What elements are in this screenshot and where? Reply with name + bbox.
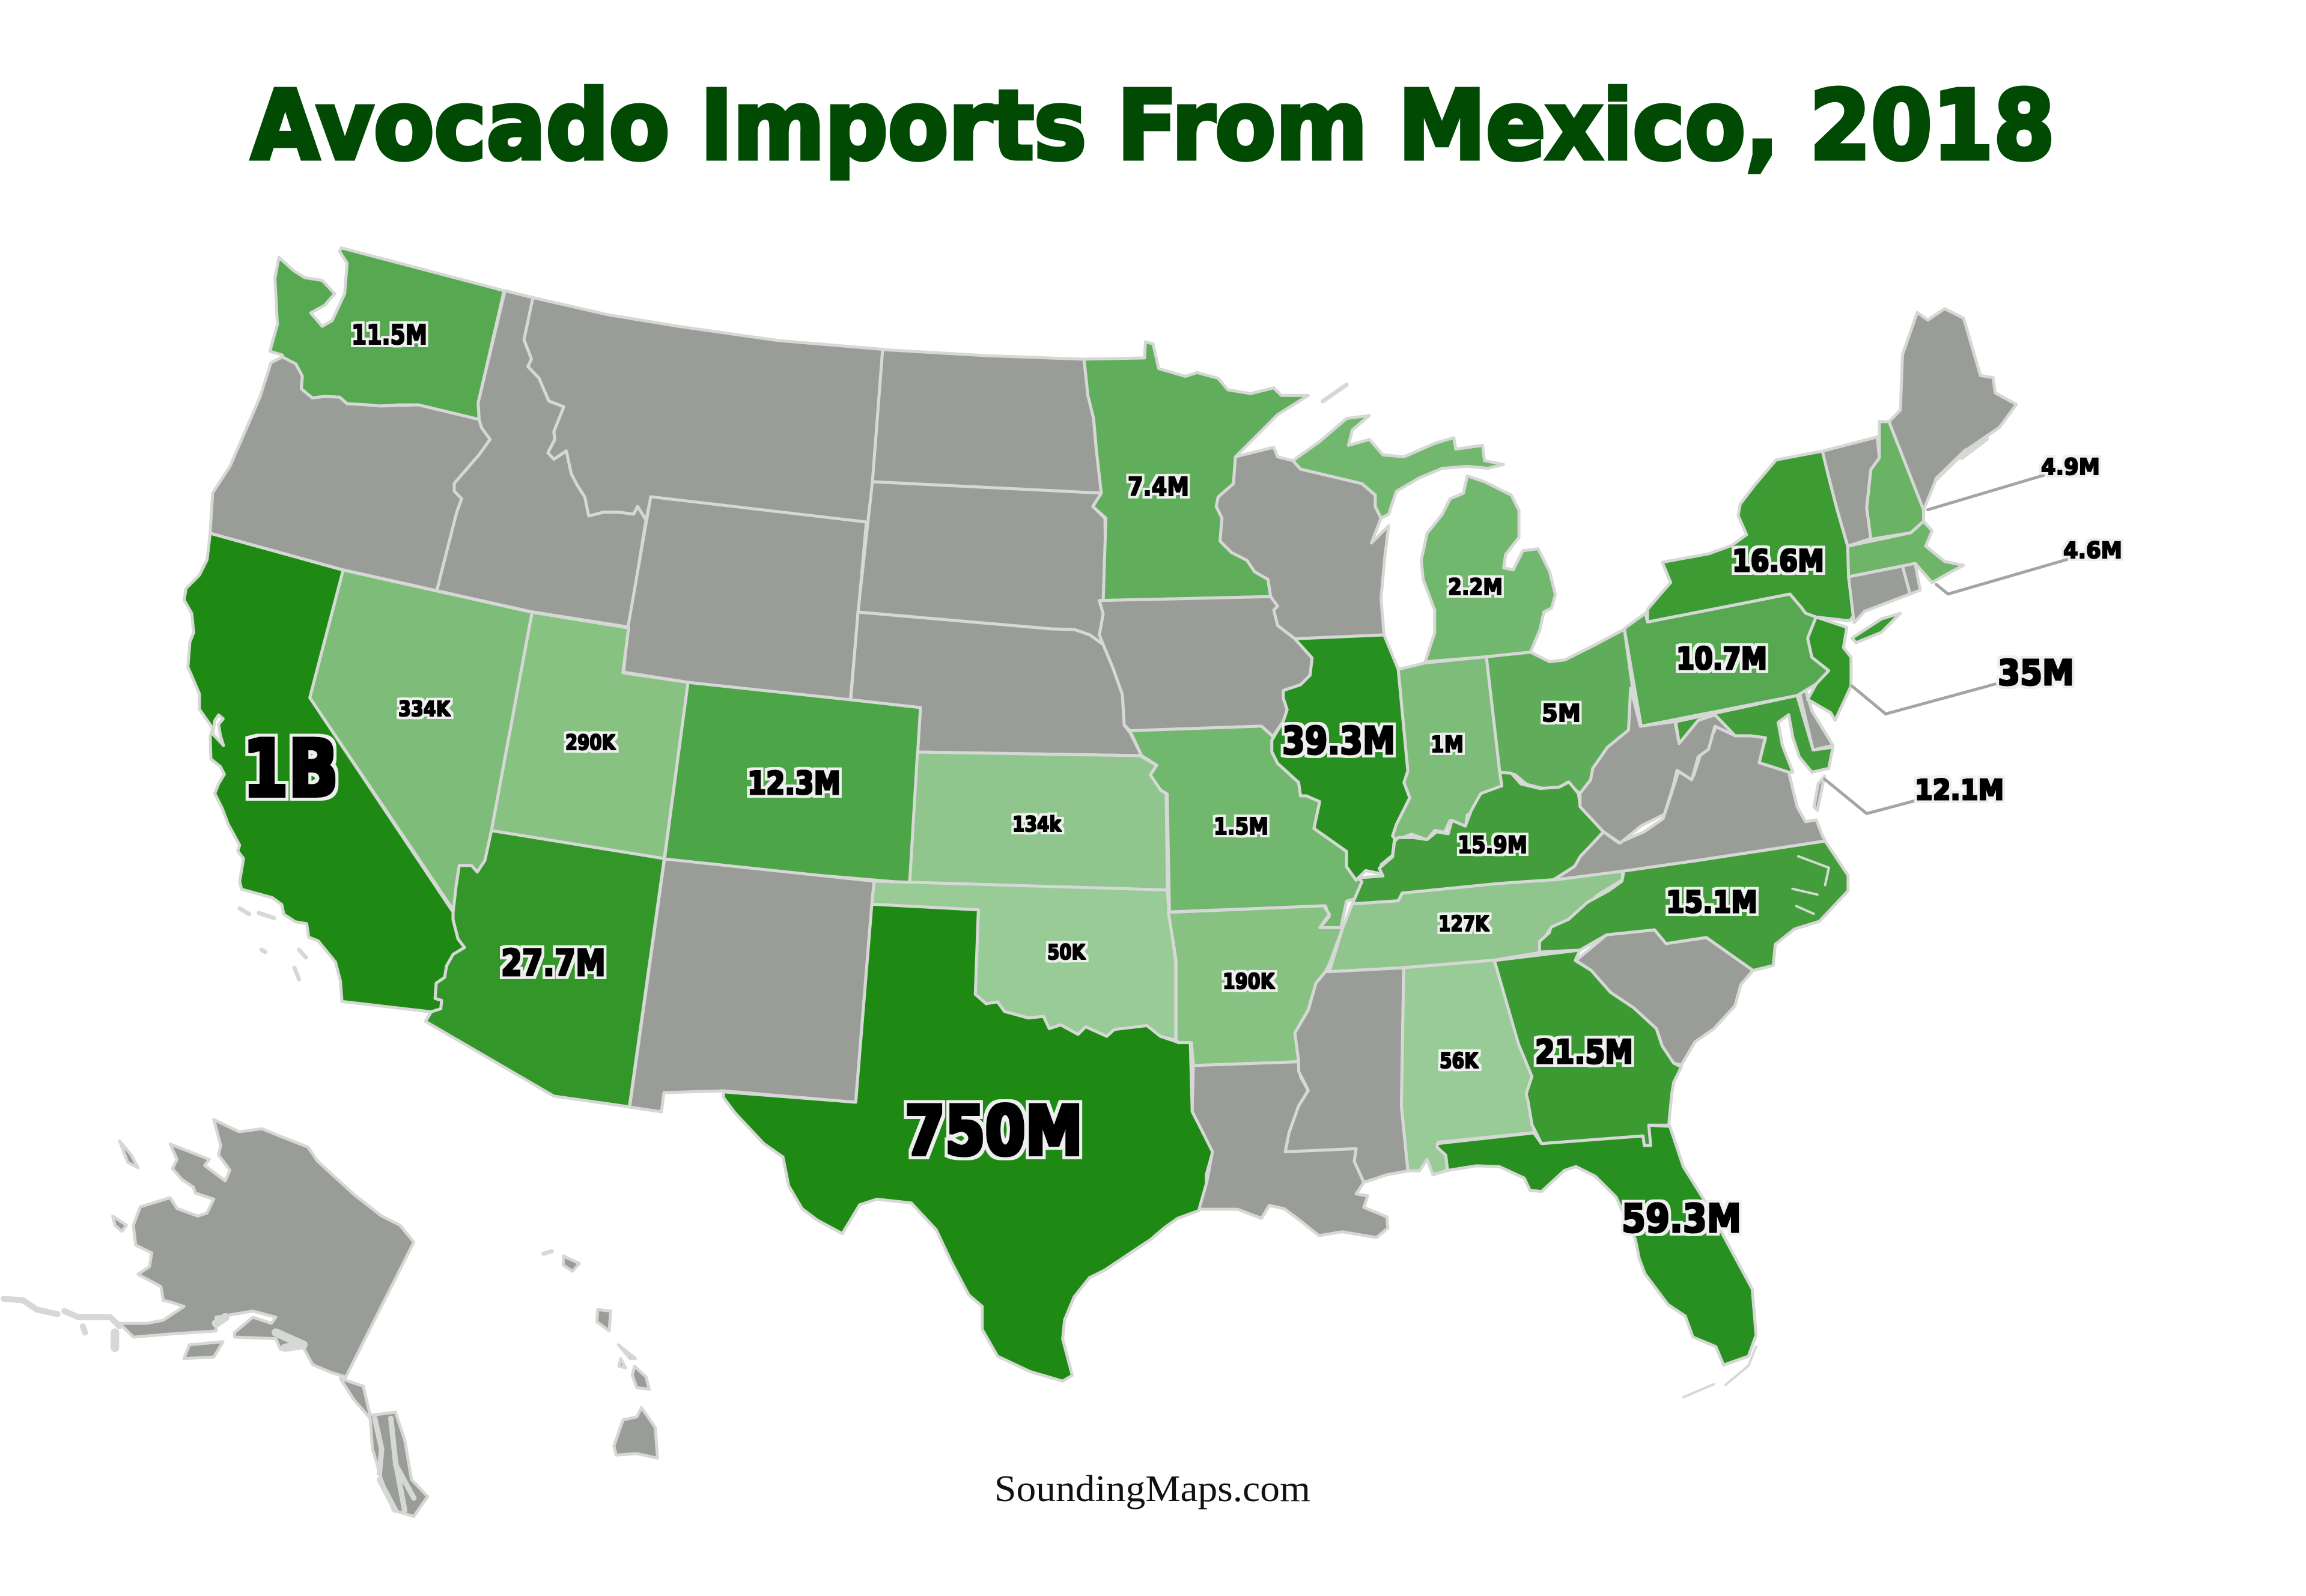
Alaska gulf coast islands [115, 1317, 303, 1348]
state: Alaska [120, 1120, 414, 1377]
Alaska panhandle [340, 1379, 428, 1516]
state: Ohio [1486, 629, 1634, 794]
Molokai [618, 1345, 636, 1359]
state: Arkansas [1169, 906, 1343, 1066]
state: New Jersey [1808, 617, 1851, 720]
state: Missouri [1130, 726, 1362, 928]
state: Nebraska [851, 612, 1142, 756]
state: Florida [1437, 1125, 1756, 1365]
Kodiak island [184, 1342, 223, 1359]
label: Florida: 59.3M [1622, 1197, 1741, 1242]
Lanai [619, 1359, 625, 1368]
Niihau [544, 1251, 552, 1254]
footer credit: SoundingMaps.com [994, 1469, 1310, 1510]
label: Kansas: 134k [1012, 813, 1062, 837]
label: Alabama: 56K [1440, 1049, 1479, 1073]
label: Nevada: 334K [398, 697, 451, 721]
state: Wyoming [624, 497, 866, 702]
state: Maine [1889, 309, 2016, 510]
title: Avocado Imports From Mexico, 2018 [251, 70, 2055, 181]
label: Pennsylvania: 10.7M [1676, 642, 1767, 677]
state: Connecticut [1849, 566, 1910, 623]
label: Michigan: 2.2M [1448, 574, 1503, 600]
state: Pennsylvania [1624, 594, 1829, 726]
state: Nevada [310, 570, 532, 911]
state: Texas [723, 904, 1213, 1381]
label: North Carolina: 15.1M [1666, 885, 1757, 920]
state: Rhode Island [1902, 563, 1920, 594]
label: California: 1B [243, 723, 338, 815]
label: New Jersey: 35M [1998, 652, 2074, 693]
Maui [632, 1366, 650, 1389]
label: Massachusetts: 4.6M [2063, 538, 2122, 563]
Maine coast islands [1936, 439, 1987, 479]
state: Idaho [437, 291, 646, 627]
state: West Virginia [1580, 688, 1735, 843]
leader line: New Hampshire [1928, 475, 2043, 510]
Oahu [597, 1309, 610, 1331]
state: New York [1647, 451, 1855, 622]
state: Montana [524, 297, 883, 524]
state: California [184, 533, 464, 1012]
icon: San Francisco bay [213, 715, 224, 745]
Hawaii big island [614, 1407, 657, 1458]
value labels [243, 319, 2122, 1242]
label: New Hampshire: 4.9M [2041, 454, 2100, 480]
state: North Dakota [872, 350, 1101, 493]
state: Georgia [1494, 950, 1681, 1145]
state: South Carolina [1576, 930, 1753, 1065]
label: Utah: 290K [565, 731, 616, 755]
state: New Hampshire [1867, 422, 1924, 539]
leader line: Massachusetts [1936, 560, 2067, 594]
state: Alabama [1401, 960, 1535, 1175]
state: Long Island, New York [1852, 613, 1900, 643]
label: Texas: 750M [905, 1091, 1083, 1171]
label: Arizona: 27.7M [501, 942, 606, 985]
California channel islands [240, 908, 306, 979]
state: Michigan upper peninsula [1293, 416, 1504, 518]
label: Washington: 11.5M [351, 319, 427, 351]
label: Georgia: 21.5M [1535, 1033, 1633, 1071]
state: Massachusetts [1848, 521, 1964, 583]
label: New York: 16.6M [1732, 544, 1824, 578]
state: Utah [491, 612, 688, 858]
state: Michigan lower peninsula [1421, 476, 1556, 662]
state: Delaware [1799, 690, 1833, 750]
Alaska panhandle islands [375, 1418, 414, 1510]
state: Kansas [910, 752, 1167, 890]
label: Illinois: 39.3M [1282, 719, 1395, 763]
state: Oregon [210, 357, 490, 590]
state: New Mexico [630, 859, 874, 1112]
label: Minnesota: 7.4M [1128, 472, 1189, 502]
state: Colorado [665, 682, 920, 883]
label: Missouri: 1.5M [1214, 813, 1268, 840]
state: Virginia [1554, 726, 1825, 880]
state: Wisconsin [1216, 448, 1389, 639]
Nunivak and Bering islands [112, 1216, 126, 1231]
label: Kentucky: 15.9M [1458, 832, 1527, 859]
label: Colorado: 12.3M [747, 765, 841, 802]
state: Indiana [1393, 657, 1501, 840]
state: South Dakota [858, 482, 1106, 645]
Saint Lawrence island [120, 1141, 138, 1168]
state: Illinois [1272, 635, 1410, 880]
state: Mississippi [1285, 968, 1408, 1182]
Pamlico sound [1792, 857, 1829, 914]
state: Louisiana [1192, 1062, 1388, 1237]
state: Washington [270, 248, 504, 419]
Isle Royale [1323, 385, 1346, 401]
leader line: New Jersey [1852, 684, 1995, 714]
label: Maryland: 12.1M [1915, 774, 2004, 806]
Florida keys [1684, 1347, 1756, 1397]
label: Indiana: 1M [1431, 732, 1464, 757]
Aleutian islands [4, 1299, 120, 1332]
state: Arizona [425, 831, 665, 1107]
leader line: Maryland [1825, 779, 1914, 813]
label: Ohio: 5M [1542, 700, 1581, 727]
state: Kentucky [1352, 772, 1604, 904]
state: Maryland [1676, 696, 1833, 772]
Virginia eastern shore [1814, 776, 1825, 810]
state: Iowa [1100, 596, 1312, 736]
state: Minnesota [1084, 342, 1308, 601]
label: Arkansas: 190K [1223, 969, 1275, 994]
Kauai [563, 1256, 579, 1271]
state: Tennessee [1330, 870, 1622, 972]
state: Oklahoma [872, 881, 1176, 1040]
label: Oklahoma: 50K [1047, 941, 1086, 965]
label: Tennessee: 127K [1438, 912, 1489, 936]
state: Vermont [1822, 437, 1879, 546]
state: North Carolina [1539, 841, 1848, 971]
